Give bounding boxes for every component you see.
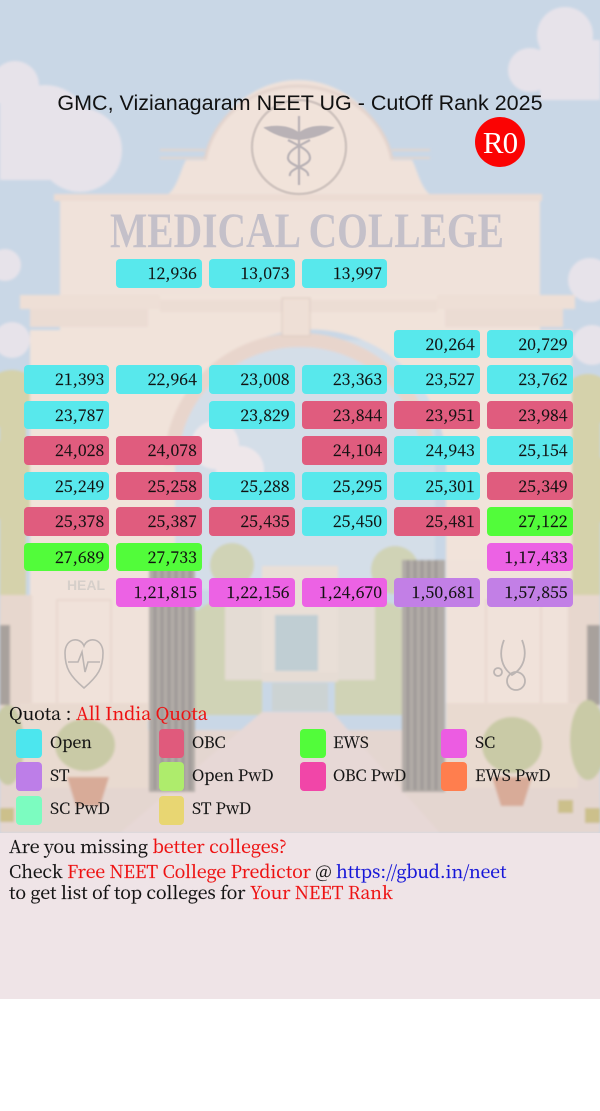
cutoff rank table: 25,378	[55, 509, 104, 532]
legend: ST PwD	[192, 796, 251, 819]
cutoff rank table: 23,951	[426, 402, 475, 426]
promo panel	[0, 833, 600, 999]
promo text: Check Free NEET College Predictor @ https://gbud.in/neet	[9, 859, 506, 884]
round badge: R0	[483, 125, 517, 160]
cutoff rank table: 27,733	[148, 544, 197, 568]
legend	[16, 729, 551, 825]
arch body	[30, 295, 572, 660]
icon: heart	[65, 640, 103, 688]
legend: EWS	[333, 730, 369, 753]
cutoff rank table: 25,288	[240, 474, 290, 496]
cutoff rank table: 24,028	[55, 438, 104, 461]
legend: Open	[50, 730, 92, 753]
cutoff rank table: 23,008	[240, 367, 290, 390]
title: GMC, Vizianagaram NEET UG - CutOff Rank 2025	[57, 91, 543, 115]
promo headline: Are you missing better colleges?	[9, 834, 287, 859]
cutoff rank table: 12,936	[148, 261, 197, 284]
cutoff rank table: 21,393	[55, 367, 104, 390]
gate lettering: MEDICAL COLLEGE	[110, 202, 504, 258]
cutoff rank table: 24,104	[333, 438, 382, 461]
cutoff rank table: 25,349	[518, 474, 568, 496]
cutoff rank table: 1,57,855	[504, 580, 568, 603]
cutoff rank table: 24,943	[426, 438, 475, 461]
cutoff rank table: 23,787	[55, 402, 104, 426]
cutoff rank table: 1,50,681	[412, 580, 475, 603]
cutoff rank table: 25,435	[240, 509, 290, 532]
cutoff rank table: 27,122	[518, 509, 568, 532]
cutoff rank table: 23,984	[518, 402, 568, 426]
cutoff rank table: 13,073	[240, 261, 290, 284]
plants	[0, 700, 600, 785]
cutoff rank table: 23,762	[518, 367, 568, 390]
cutoff rank table: 25,301	[426, 474, 475, 496]
cutoff rank table: 1,21,815	[134, 580, 197, 603]
legend: SC	[475, 730, 495, 753]
icon: stethoscope	[494, 640, 525, 690]
side pillars	[32, 560, 149, 720]
cutoff rank table: 1,17,433	[504, 544, 568, 568]
trees	[0, 370, 600, 620]
cutoff rank table: 27,689	[55, 544, 104, 568]
cutoff rank table: 1,24,670	[319, 580, 382, 603]
legend: OBC PwD	[333, 763, 406, 786]
cutoff rank table: 23,527	[426, 367, 475, 390]
cutoff rank table: 23,363	[333, 367, 382, 390]
cutoff rank table: 25,258	[148, 474, 197, 496]
cutoff rank table: 13,997	[333, 261, 382, 284]
promo text: to get list of top colleges for Your NEET Rank	[9, 880, 393, 905]
legend: EWS PwD	[475, 763, 551, 786]
background illustration: medical college gate: HEAL	[67, 577, 105, 593]
legend: SC PwD	[50, 796, 110, 819]
cutoff rank table: 25,295	[333, 474, 382, 496]
cutoff rank table: 23,829	[240, 402, 290, 426]
road and ground	[0, 730, 600, 833]
legend: OBC	[192, 730, 226, 753]
cutoff rank table: 22,964	[148, 367, 197, 390]
cutoff rank table: 25,249	[55, 474, 104, 496]
cutoff rank table: 20,264	[426, 332, 475, 354]
cutoff rank table: 25,481	[426, 509, 475, 532]
round badge	[475, 117, 525, 167]
inner building	[225, 600, 375, 680]
legend: ST	[50, 763, 69, 786]
cutoff rank table: 20,729	[518, 332, 568, 354]
promo text	[9, 859, 506, 905]
cutoff rank table: 1,22,156	[226, 580, 290, 603]
cutoff rank table: 25,387	[148, 509, 197, 532]
emblem	[252, 100, 346, 194]
gates	[149, 560, 195, 792]
cutoff rank table: 25,154	[518, 438, 568, 461]
cutoff rank table	[24, 259, 573, 607]
cutoff rank table: 23,844	[333, 402, 382, 426]
arch top	[60, 80, 540, 300]
cutoff rank table: 24,078	[148, 438, 197, 461]
cutoff rank table: 25,450	[333, 509, 382, 532]
legend: Open PwD	[192, 763, 274, 786]
quota line: Quota : All India Quota	[9, 701, 208, 726]
background illustration: medical college gate	[0, 0, 600, 833]
